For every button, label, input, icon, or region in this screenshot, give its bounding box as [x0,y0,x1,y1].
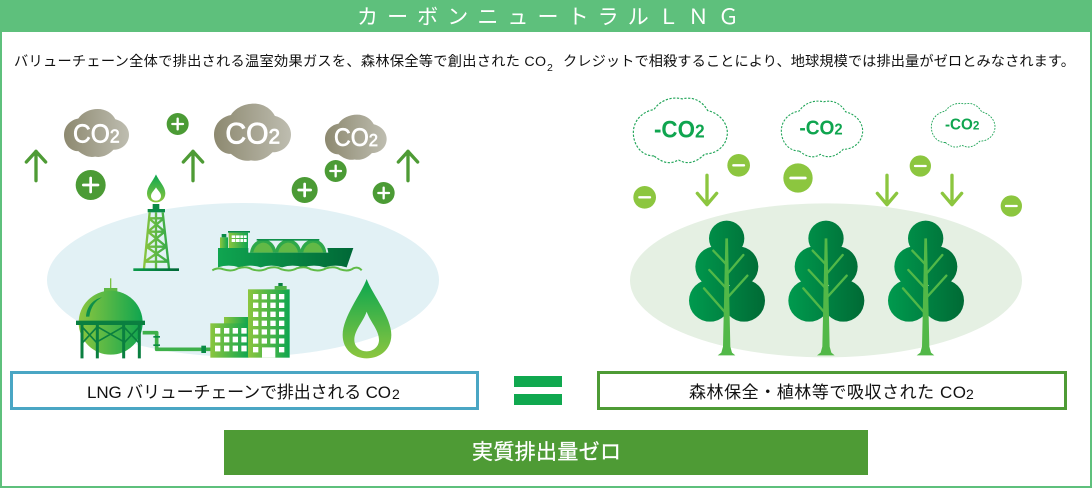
panel: LNG value chain illustration [26,104,439,358]
cloud: CO2 two: CO2 [225,118,280,151]
icon: tree three [888,221,964,355]
label box: CO2 absorbed by forests: 森林保全・植林等で吸収された CO [689,383,966,402]
plus sign one [167,113,189,135]
intro text [14,53,1075,74]
title band [0,0,1092,32]
result bar: net zero: 実質排出量ゼロ [472,441,621,464]
minus sign four [910,155,931,177]
equals sign [514,376,562,405]
result bar: net zero [224,430,868,475]
plus sign two [76,170,106,200]
cloud: CO2 one: CO2 [73,118,120,148]
minus sign three [783,163,813,193]
intro text: バリューチェーン全体で排出される温室効果ガスを、森林保全等で創出された CO [14,53,546,70]
minus sign two [633,186,656,209]
left background ellipse [47,203,439,357]
panel: forest absorption illustration [630,98,1022,357]
pipe from tank to buildings [143,333,211,353]
arrow down one [697,175,717,205]
label box: CO2 absorbed by forests: 2 [966,386,974,402]
label box: LNG value chain emissions: LNG バリューチェーンで排出される CO [87,383,391,402]
plus sign five [373,182,395,204]
cloud: CO2 one [64,109,129,157]
icon: gas rig with flame [133,174,179,271]
minus sign one [727,154,750,177]
arrow down three [942,175,962,205]
arrow up two [183,151,203,181]
dashed cloud: -CO2 two: -CO2 [799,116,843,139]
icon: tree one [689,221,765,355]
cloud: CO2 three: CO2 [334,125,378,152]
dashed cloud: -CO2 three: -CO2 [945,116,979,133]
label box: LNG value chain emissions: 2 [392,386,400,402]
intro text: クレジットで相殺することにより、地球規模では排出量がゼロとみなされます。 [563,54,1075,70]
label box: LNG value chain emissions [12,372,478,408]
arrow down two [877,175,897,205]
dashed cloud: -CO2 one: -CO2 [654,117,705,144]
cloud: CO2 two [214,104,291,161]
label box: CO2 absorbed by forests [598,372,1066,408]
icon: tree two [788,221,864,355]
plus sign four [325,160,347,182]
plus sign three [292,177,318,203]
arrow up three [398,151,418,181]
icon: liquid drop [343,279,391,358]
intro text: 2 [547,62,553,74]
dashed cloud: -CO2 three [931,103,995,147]
dashed cloud: -CO2 one [633,98,727,163]
minus sign five [1001,195,1022,217]
title band: カーボンニュートラルＬＮＧ [357,6,739,29]
arrow up one [26,151,46,181]
icon: spherical gas tank [76,278,145,358]
dashed cloud: -CO2 two [781,101,863,157]
icon: LNG carrier ship [212,231,362,270]
right background ellipse [630,203,1022,357]
icon: buildings [210,283,290,358]
cloud: CO2 three [325,115,387,160]
